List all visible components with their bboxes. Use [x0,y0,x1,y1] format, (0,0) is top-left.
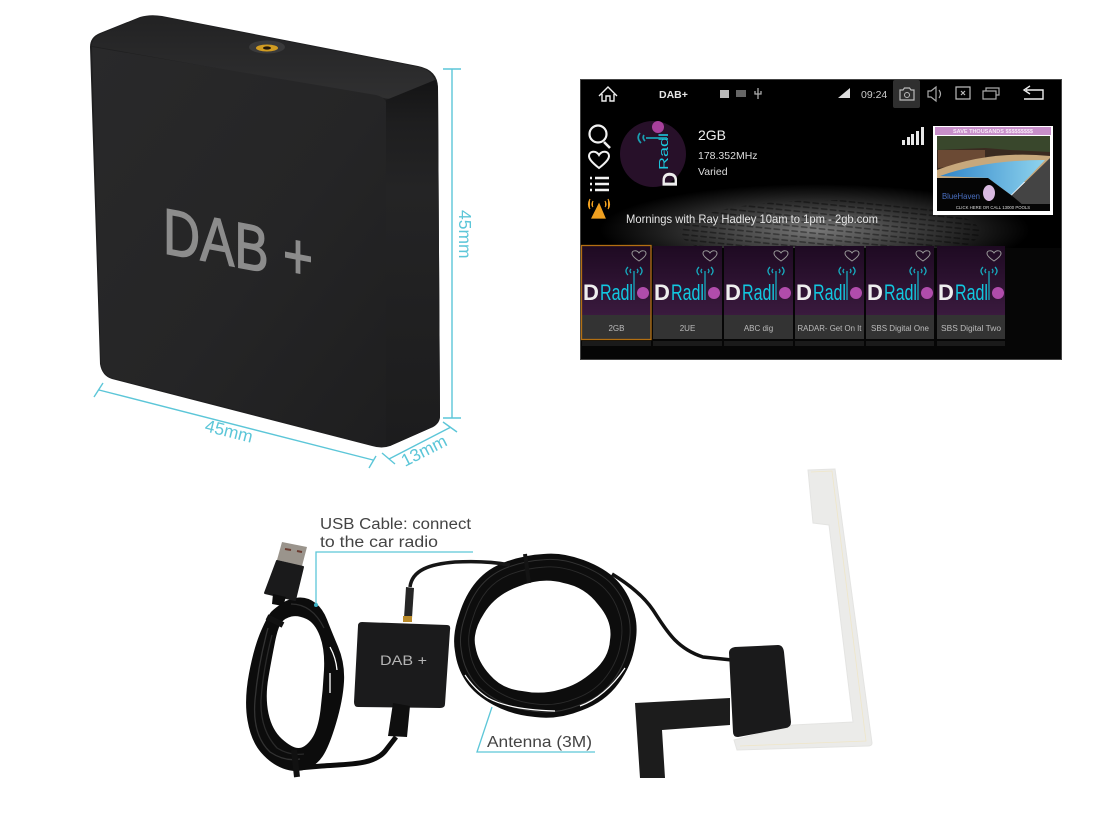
station tile: SBS Digital Two: Radl [955,280,988,305]
station tile: 2GB: D [583,280,599,305]
USB callout text: USB Cable: connect [320,516,472,533]
station tile: ABC dig: D [725,280,741,305]
icon: speaker [928,87,940,101]
antenna lead to module [410,562,510,587]
device right side [386,80,440,446]
dimension: depth [382,422,457,471]
device body [90,15,440,447]
advert footer text: CLICK HERE OR CALL 13000 POOLS [956,205,1030,210]
station name: 2GB [698,127,726,143]
USB plug [265,542,307,606]
station tile: 2UE [653,246,722,346]
USB cable coil [246,597,344,771]
dimension: height [443,69,475,418]
status bar [599,80,1043,108]
logo letter D: D [659,172,682,187]
antenna cable coil [454,554,637,718]
advert mascot [983,185,995,201]
coil cable tie [525,554,529,583]
station tile: SBS Digital One [866,246,934,346]
icon: list [590,178,609,190]
station tile: SBS Digital One: D [867,280,883,305]
station tile: SBS Digital Two: D [938,280,954,305]
station tile: 2GB: 2GB [608,324,625,333]
logo wave [638,133,667,143]
depth label: 13mm [398,431,450,471]
advert black footer [937,178,1050,211]
status icons [720,88,761,99]
logo rotated text: Radl [656,133,671,170]
side menu icons [588,126,610,218]
station tile: RADAR: RADAR- Get On It [798,324,862,333]
device label: DAB + [163,195,313,295]
station tile: 2GB [582,246,651,346]
station tile: ABC dig [724,246,793,346]
USB leader dot [314,603,318,607]
callout: USB cable [314,516,473,607]
cable ties [267,617,297,777]
USB callout text: to the car radio [320,534,438,551]
station tile: RADAR: D [796,280,812,305]
advert: pool [933,126,1053,215]
advert banner [935,127,1051,135]
panel: head unit screen [580,79,1062,360]
logo purple dot [652,121,664,133]
film conductor trace [740,471,866,746]
device front face [92,47,387,446]
USB leader line [316,552,473,605]
station tile: 2GB: Radl [600,280,633,305]
station tile: 2UE: 2UE [680,324,695,333]
dimension: width [94,383,376,468]
signal bars [902,127,924,145]
advert photo [937,136,1050,204]
station tile: ABC dig: ABC dig [744,324,773,333]
icon: orange tower [588,199,610,218]
icon: home [599,87,617,101]
width label: 45mm [203,415,255,447]
station tile: ABC dig: Radl [742,280,775,305]
amplifier tape [635,698,730,778]
station tile: SBS Digital Two [937,246,1005,346]
USB cable to module [298,737,396,768]
antenna callout text: Antenna (3M) [487,734,592,751]
icon: camera lens [904,92,910,98]
device top edge [92,16,435,99]
station tile: RADAR: Radl [813,280,846,305]
station tile: RADAR [795,246,864,346]
status title: DAB+ [659,89,688,101]
icon: heart [589,152,609,168]
station tile: SBS Digital One: Radl [884,280,917,305]
DAB+ module [354,622,450,708]
antenna lead to amplifier [612,574,732,660]
station tile: SBS Digital One: SBS Digital One [871,324,930,333]
icon: windows [983,88,999,99]
station tile: 2UE: D [654,280,670,305]
advert banner text: SAVE THOUSANDS $$$$$$$$$ [953,129,1033,135]
camera button [893,80,920,108]
icon: back arrow [1024,86,1043,99]
genre: Varied [698,166,728,178]
icon: cell signal [838,88,850,98]
USB-C plug [388,703,410,737]
callout: antenna [477,707,595,752]
now playing text: Mornings with Ray Hadley 10am to 1pm - 2gb.com [626,212,878,226]
module label: DAB + [380,653,427,668]
product photo: DAB+ box [90,15,440,447]
clock: 09:24 [861,89,887,101]
icon: search [604,142,610,148]
height label: 45mm [455,210,475,259]
frequency: 178.352MHz [698,150,758,162]
product photo: kit with cables [246,469,872,778]
coil white gaps [465,668,625,711]
station logo [620,121,686,187]
icon: camera [900,88,914,100]
advert brand: BlueHaven [942,192,980,201]
gold antenna socket [249,40,285,54]
station tile: 2UE: Radl [671,280,704,305]
windscreen antenna film [734,469,872,750]
station tile: SBS Digital Two: SBS Digital Two [941,324,1002,333]
antenna leader line [477,707,595,752]
SMA connector [403,587,414,622]
icon: close box [956,87,970,99]
amplifier box [729,645,791,737]
icon: search ring [590,126,606,142]
